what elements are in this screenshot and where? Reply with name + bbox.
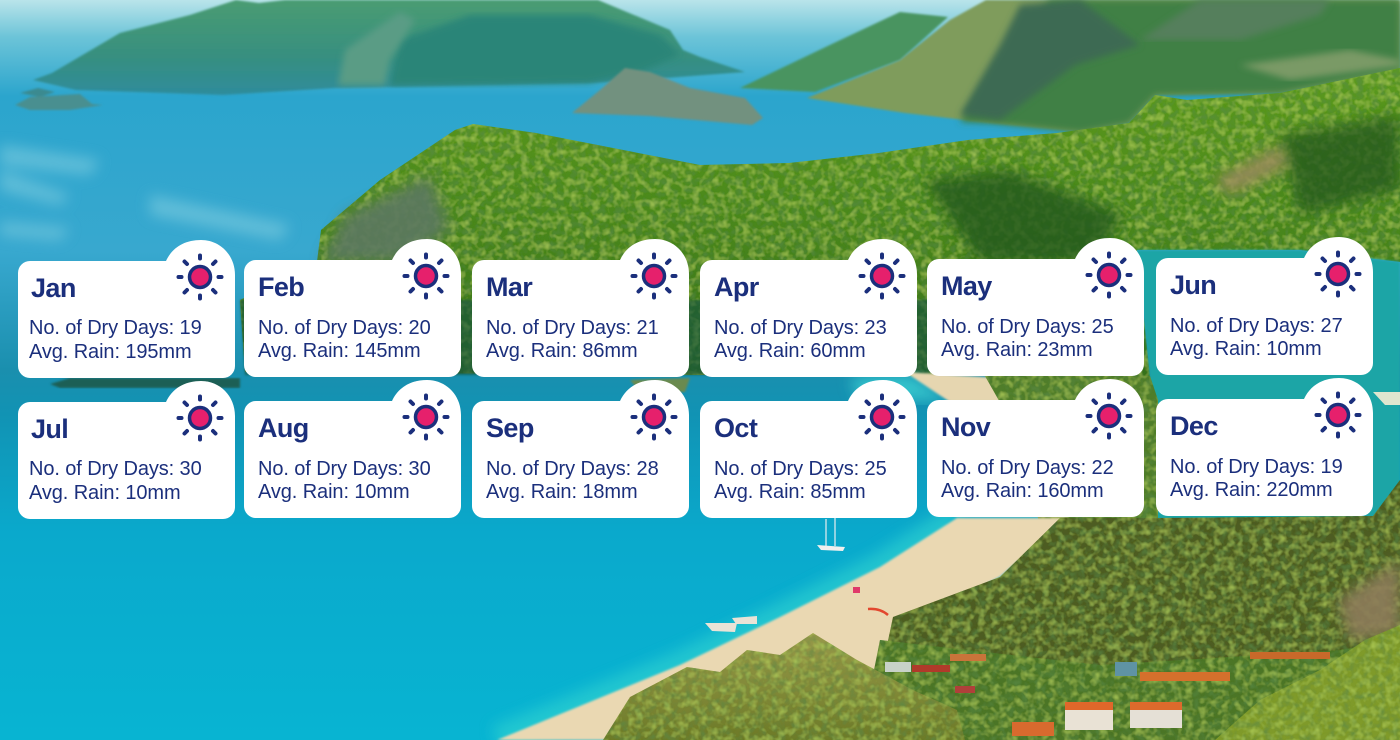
card: February [244, 239, 461, 377]
rocky islet [572, 68, 763, 125]
card: July: Jul [31, 414, 68, 444]
sailboat [817, 518, 845, 551]
lagoon on the right [1060, 250, 1400, 530]
pale rock on the far headland [338, 12, 415, 85]
card: May: No. of Dry Days: 25 [941, 316, 1114, 338]
small rocky outcrop between rows [630, 378, 690, 392]
card: August: No. of Dry Days: 30 [258, 458, 431, 480]
icon: sun [632, 396, 676, 438]
icon: sun [178, 396, 222, 440]
sand spit [905, 372, 1030, 402]
card: October [700, 380, 917, 518]
olive hillside [885, 480, 1400, 672]
card: May: Avg. Rain: 23mm [941, 339, 1093, 361]
red paraglider [868, 609, 888, 615]
icon: sun [1088, 394, 1130, 438]
icon: sun [178, 256, 222, 298]
card: January: No. of Dry Days: 19 [29, 317, 202, 339]
village [860, 640, 1400, 740]
dark slope on the right [1280, 115, 1400, 215]
card: July: No. of Dry Days: 30 [29, 458, 202, 480]
shallow water near the sand spit [850, 375, 950, 400]
card: December: Dec [1170, 411, 1218, 441]
card: August: Aug [258, 413, 309, 443]
far left headland [33, 0, 745, 95]
card: September: Sep [486, 413, 534, 443]
card: June [1156, 237, 1373, 375]
bright shallows along beach [497, 518, 957, 740]
icon: sun [1088, 254, 1130, 296]
card: April [700, 239, 917, 377]
dark shore under January card [50, 378, 240, 388]
card: March: Mar [486, 272, 533, 302]
moored boats [705, 616, 757, 632]
card: January: Avg. Rain: 195mm [29, 341, 192, 363]
card: April: Apr [714, 272, 760, 302]
card: January: Jan [31, 273, 76, 303]
rock cliff on the hillside [1338, 560, 1400, 640]
card: November: Nov [941, 412, 991, 442]
card: November: Avg. Rain: 160mm [941, 480, 1104, 502]
green peninsula [985, 376, 1158, 525]
card: February: Avg. Rain: 145mm [258, 340, 421, 362]
card: March: Avg. Rain: 86mm [486, 340, 638, 362]
foreground trees, centre [603, 633, 965, 740]
light reflections on water [0, 145, 290, 240]
card: August: Avg. Rain: 10mm [258, 481, 410, 503]
card: April: No. of Dry Days: 23 [714, 317, 887, 339]
card: December: Avg. Rain: 220mm [1170, 479, 1333, 501]
card: August [244, 380, 461, 518]
card: October: Oct [714, 413, 758, 443]
card: June: Jun [1170, 270, 1216, 300]
card: October: Avg. Rain: 85mm [714, 481, 866, 503]
sand streak at right edge [1373, 392, 1400, 405]
card: February: No. of Dry Days: 20 [258, 317, 431, 339]
card: January [18, 240, 235, 378]
card: September [472, 380, 689, 518]
card: March: No. of Dry Days: 21 [486, 317, 659, 339]
card: October: No. of Dry Days: 25 [714, 458, 887, 480]
card: February: Feb [258, 272, 304, 302]
card: July: Avg. Rain: 10mm [29, 482, 181, 504]
icon: sun [1316, 252, 1360, 296]
card: September: Avg. Rain: 18mm [486, 481, 638, 503]
tan rock on the right slope [1213, 145, 1290, 195]
icon: sun [632, 254, 676, 298]
card: November [927, 379, 1144, 517]
icon: sun [404, 254, 448, 298]
card: December: No. of Dry Days: 19 [1170, 456, 1343, 478]
lower dark hill band behind cards [240, 300, 930, 375]
icon: sun [404, 396, 448, 438]
card: June: No. of Dry Days: 27 [1170, 315, 1343, 337]
card: June: Avg. Rain: 10mm [1170, 338, 1322, 360]
icon: sun [860, 396, 904, 438]
card: May: May [941, 271, 992, 301]
main green hill [240, 68, 1400, 376]
card: December [1156, 378, 1373, 516]
card: March [472, 239, 689, 377]
pink kite [853, 587, 860, 593]
dark valley on main hill [923, 170, 1124, 262]
beach [497, 518, 1068, 740]
card: September: No. of Dry Days: 28 [486, 458, 659, 480]
small left islets [15, 88, 103, 110]
card: July [18, 381, 235, 519]
card: November: No. of Dry Days: 22 [941, 457, 1114, 479]
far right mountains [740, 0, 1400, 132]
icon: sun [1316, 394, 1360, 436]
card: April: Avg. Rain: 60mm [714, 340, 866, 362]
rocky face on main hill [321, 175, 450, 262]
foreground trees, right [1215, 625, 1400, 740]
shaded face of the far headland [390, 15, 680, 85]
icon: sun [860, 254, 904, 298]
card: May [927, 238, 1144, 376]
